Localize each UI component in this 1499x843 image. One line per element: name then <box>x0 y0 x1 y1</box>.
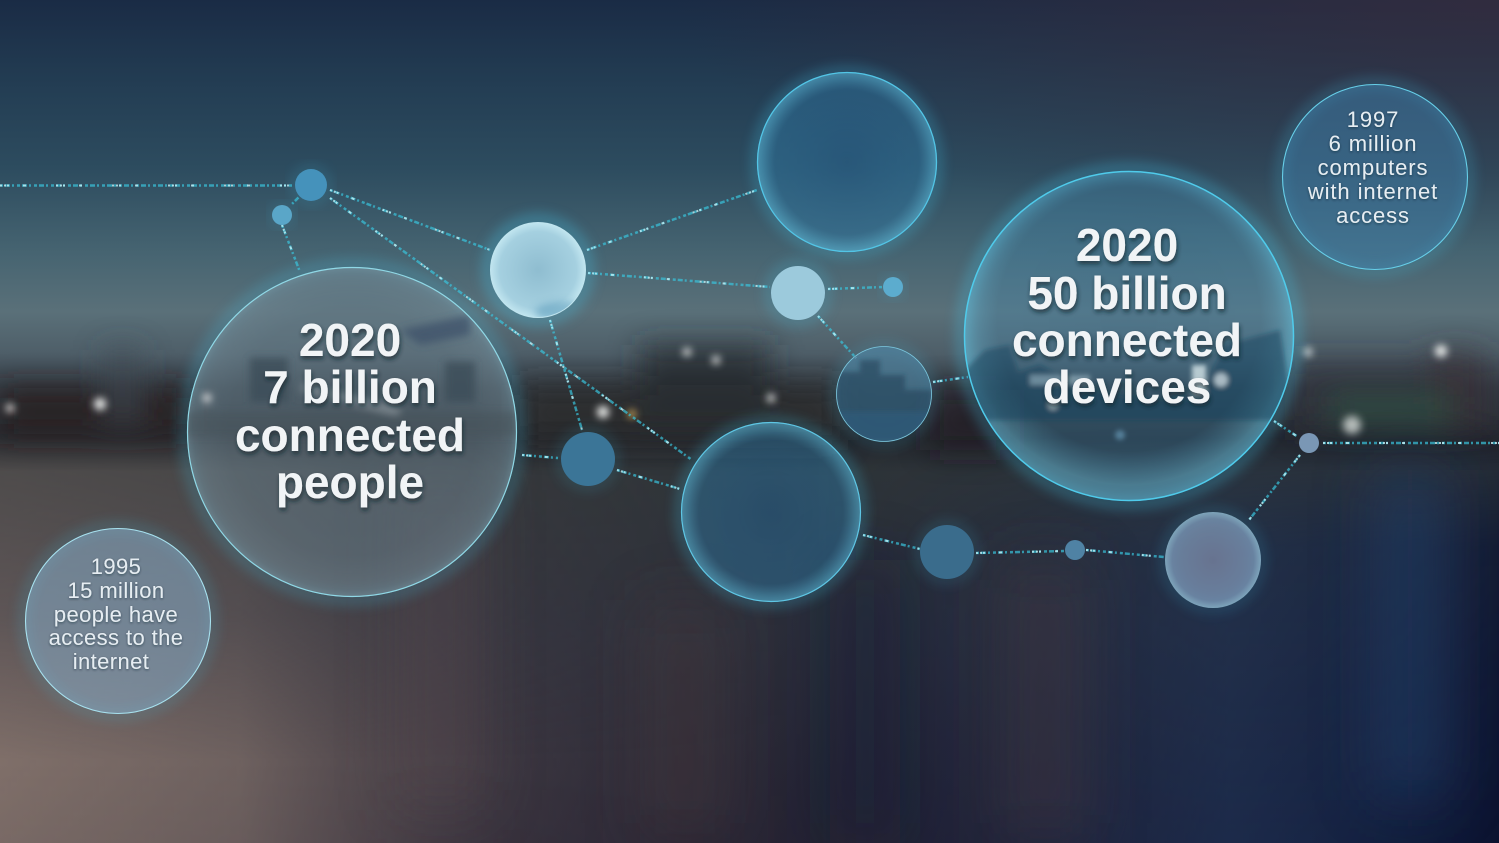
heading: 7 billion connected people: people <box>276 456 424 508</box>
heading: 7 billion connected people: 7 billion <box>263 361 437 413</box>
heading: 50 billion connected devices: connected <box>1012 314 1242 366</box>
node: white small centre <box>770 265 826 321</box>
heading: 7 billion connected people: connected <box>235 409 465 461</box>
node: large centre bottom <box>681 422 861 602</box>
callout: 1997 <box>1281 83 1469 271</box>
node: medium bottom <box>920 525 974 579</box>
node: city lens <box>836 346 932 442</box>
heading: 7 billion connected people: 2020 <box>299 314 401 366</box>
callout: 1997: with internet <box>1307 179 1438 204</box>
callout: 1997: 1997 <box>1347 107 1399 132</box>
node: tiny right <box>1299 433 1319 453</box>
callout: 1995: people have <box>54 602 178 627</box>
small node: below top left <box>272 205 292 225</box>
small node: top left <box>295 169 327 201</box>
heading: 50 billion connected devices: 2020 <box>1076 219 1178 271</box>
callout: 1997: access <box>1336 203 1410 228</box>
heading: 50 billion connected devices: devices <box>1043 361 1211 413</box>
node: grey-blue bottom right <box>1165 512 1261 608</box>
callout: 1997: computers <box>1318 155 1428 180</box>
lens: 7 billion connected people <box>185 265 519 599</box>
node: top large blue <box>757 72 937 252</box>
node: tiny bottom <box>1065 540 1085 560</box>
heading: 50 billion connected devices <box>1012 219 1242 413</box>
callout: 1995: access to the <box>49 625 183 650</box>
callout: 1995: internet <box>73 649 149 674</box>
node: tiny right of centre <box>883 277 903 297</box>
lens: 50 billion connected devices <box>962 169 1296 503</box>
callout: 1995 <box>24 527 212 715</box>
node: medium lower left <box>561 432 615 486</box>
callout: 1995: 15 million <box>68 578 164 603</box>
callout: 1997: 6 million <box>1329 131 1417 156</box>
bright node <box>488 220 595 322</box>
connection lines <box>0 186 1499 557</box>
callout: 1995: 1995 <box>91 554 141 579</box>
heading: 7 billion connected people <box>235 314 465 508</box>
heading: 50 billion connected devices: 50 billion <box>1027 267 1227 319</box>
